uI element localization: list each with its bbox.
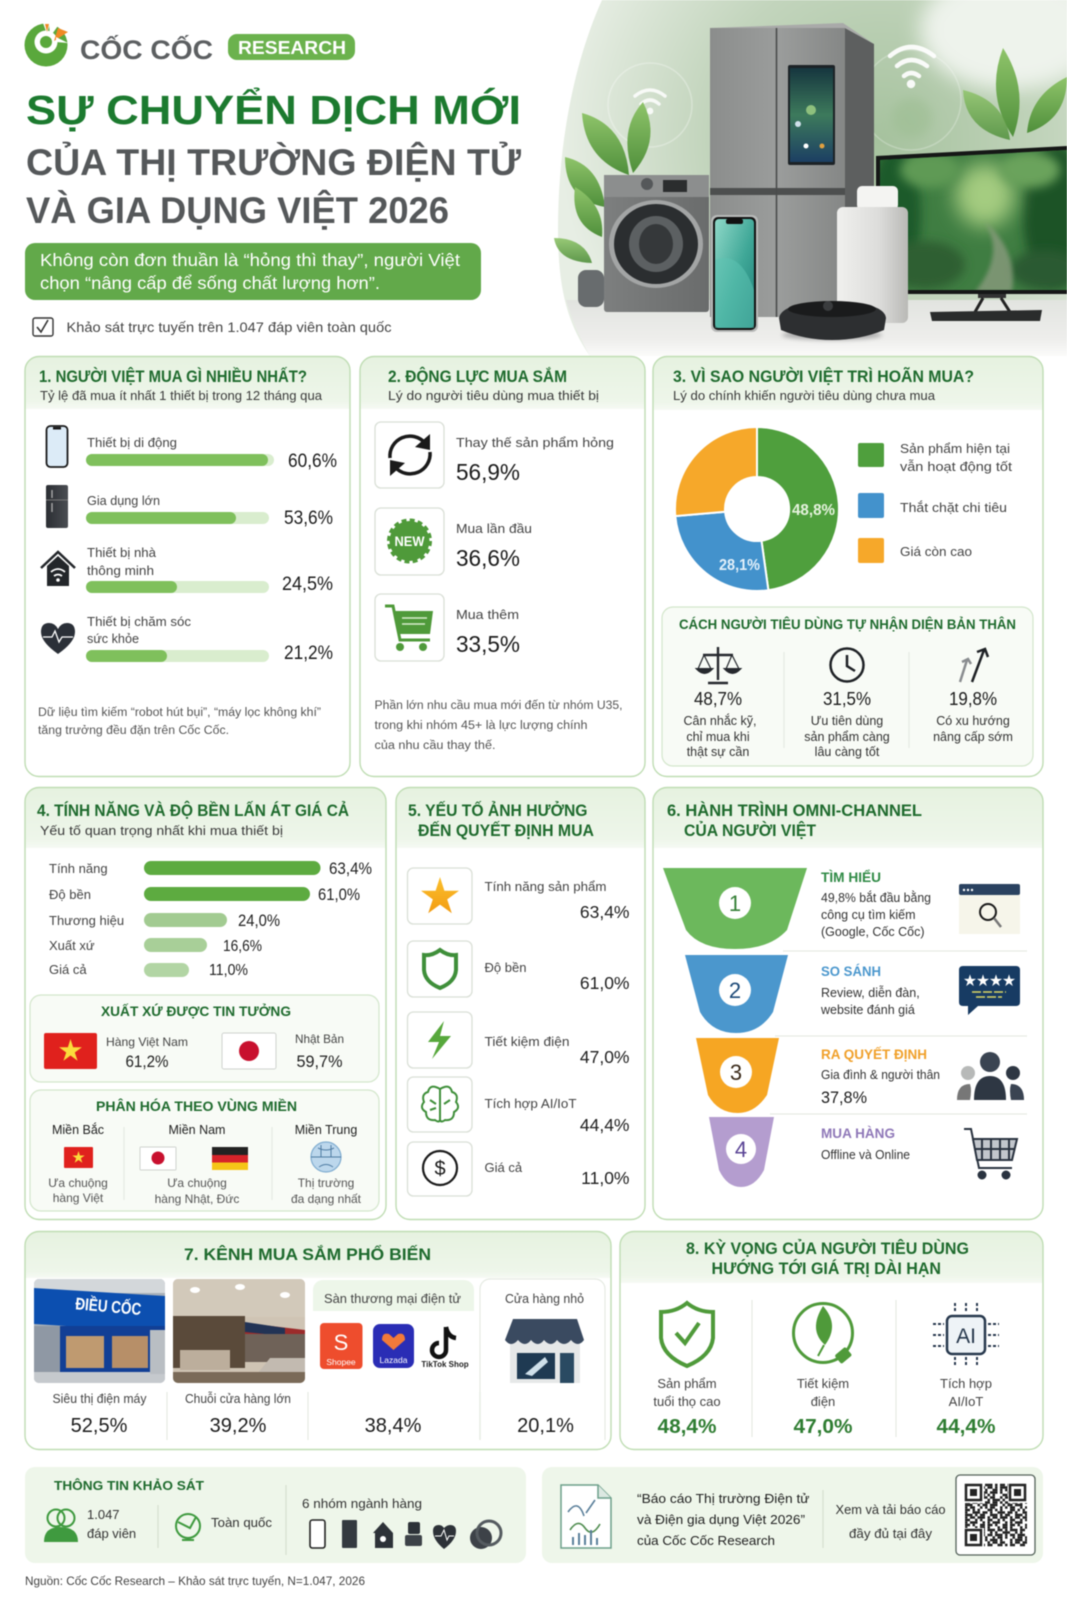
subtitle banner: chọn “nâng cấp để sống chất lượng hơn”.	[40, 273, 380, 293]
icon: Japan flag	[222, 1033, 276, 1069]
icon: shield check	[661, 1303, 713, 1366]
hero illustration: smart appliances	[554, 0, 1067, 356]
factor: price	[484, 1160, 630, 1188]
stat: respondents: 1.047	[87, 1507, 120, 1522]
icon: fridge	[710, 23, 874, 317]
step text: research: 49,8% bắt đầu bằng	[821, 890, 931, 905]
note: của nhu cầu thay thế.	[374, 740, 496, 752]
region: south: hàng Nhật, Đức	[155, 1192, 239, 1206]
bar chart: factors: Xuất xứ	[49, 938, 95, 953]
label: store chain	[185, 1391, 291, 1437]
bar chart: factors: 63,4%	[329, 860, 372, 878]
icon: people	[957, 1052, 1024, 1100]
panel 3: why delay buying	[653, 356, 1043, 776]
icon: review bubble	[959, 966, 1020, 1015]
factor: durability	[484, 960, 630, 993]
note	[38, 707, 321, 737]
icon: wifi left	[635, 90, 665, 113]
label: electronics supermarket: Siêu thị điện máy	[52, 1391, 147, 1406]
note: trong khi nhóm 45+ là lực lượng chính	[374, 720, 588, 732]
stat: nationwide: Toàn quốc	[211, 1515, 272, 1530]
stat: replace broken: 56,9%	[456, 459, 520, 485]
note: Dữ liệu tìm kiếm “robot hút bụi”, “máy lọc không khí”	[38, 707, 321, 719]
stat: considered: chỉ mua khi	[686, 730, 750, 744]
icon: fridge small	[46, 485, 68, 528]
title: VÀ GIA DỤNG VIỆT 2026	[26, 189, 449, 231]
icon: tv	[869, 145, 1067, 321]
stat: considered	[684, 689, 756, 759]
row: smart home: Thiết bị nhà	[87, 545, 157, 560]
bar chart: factors: Thương hiệu	[49, 913, 124, 928]
panel 8: consumer expectations: 8. KỲ VỌNG CỦA NGƯỜI TIÊU DÙNG	[686, 1239, 969, 1258]
stat: first purchase: 36,6%	[456, 545, 520, 571]
bar chart: factors: 16,6%	[223, 938, 262, 955]
icon: smart home	[41, 552, 75, 586]
stat: AI/IoT: AI/IoT	[949, 1394, 983, 1409]
row: mobile devices: 60,6%	[288, 451, 337, 472]
icon: AI chip: AI	[956, 1325, 976, 1348]
stat: upgrade early	[933, 689, 1013, 744]
panel 5: purchase decision factors: ĐẾN QUYẾT ĐỊNH MUA	[418, 821, 594, 840]
icon: Lazada	[373, 1324, 414, 1368]
row: smart home: 24,5%	[282, 574, 333, 595]
sub-panel: trusted origins	[30, 995, 379, 1082]
factor: AI/IoT: 44,4%	[580, 1115, 630, 1135]
stat: first purchase: Mua lần đầu	[456, 521, 532, 536]
panel 4: features and durability over price: Yếu tố quan trọng nhất khi mua thiết bị	[40, 823, 283, 838]
photo: electronics supermarket: ĐIỀU CỐC	[75, 1293, 142, 1319]
legend: Thắt chặt chi tiêu	[900, 500, 1007, 515]
row: smart home	[86, 545, 333, 595]
funnel step 3: 3	[730, 1060, 742, 1085]
icon: heart	[41, 623, 75, 654]
icon: new badge	[375, 508, 444, 575]
funnel step 1: 1	[729, 891, 741, 916]
funnel step 2: 2	[729, 978, 741, 1003]
subtitle banner: Không còn đơn thuần là “hỏng thì thay”, người Việt	[40, 250, 460, 270]
report title: và Điện gia dụng Việt 2026”	[637, 1512, 805, 1527]
title	[26, 86, 521, 231]
panel 1: what Vietnamese buy most	[25, 356, 350, 776]
sub-panel: trusted origins: 61,2%	[126, 1053, 169, 1071]
step text: research: (Google, Cốc Cốc)	[821, 925, 925, 939]
row: health devices	[86, 614, 333, 664]
factor: features: 63,4%	[580, 902, 630, 922]
factor: features	[484, 879, 630, 922]
donut chart	[675, 427, 839, 591]
source note: Nguồn: Cốc Cốc Research – Khảo sát trực tuyến, N=1.047, 2026	[25, 1574, 365, 1588]
stat: additional purchase: 33,5%	[456, 631, 520, 657]
icon: report document	[561, 1485, 611, 1548]
factor: price: Giá cả	[484, 1160, 523, 1175]
sub-panel: trusted origins: Nhật Bản	[295, 1032, 344, 1046]
stat: replace broken	[456, 435, 614, 485]
download call to action	[836, 1502, 946, 1541]
panel 6: omni-channel journey: CỦA NGƯỜI VIỆT	[684, 821, 816, 840]
photo: electronics supermarket	[34, 1279, 165, 1383]
download call to action: đầy đủ tại đây	[849, 1526, 933, 1541]
step text: compare: Review, diễn đàn,	[821, 985, 920, 1000]
factor: durability: 61,0%	[580, 973, 630, 993]
title: SỰ CHUYỂN DỊCH MỚI	[26, 86, 521, 133]
QR code	[956, 1475, 1035, 1555]
icon: new badge: NEW	[394, 533, 425, 549]
factor: durability: Độ bền	[484, 960, 526, 975]
stat: additional purchase	[456, 607, 520, 657]
icon: star	[408, 868, 472, 924]
factor: energy saving	[484, 1034, 630, 1067]
icon: bolt	[408, 1012, 472, 1068]
bar chart: factors: 61,0%	[318, 886, 360, 904]
stat: additional purchase: Mua thêm	[456, 607, 519, 622]
step text: compare	[820, 963, 920, 1017]
panel 4: features and durability over price: 4. TÍNH NĂNG VÀ ĐỘ BỀN LẤN ÁT GIÁ CẢ	[37, 801, 349, 820]
factor: energy saving: Tiết kiệm điện	[484, 1034, 570, 1049]
sub-panel: regional differences	[30, 1090, 379, 1211]
legend	[858, 441, 1012, 563]
stat: use long: 31,5%	[823, 689, 871, 709]
stat: respondents: đáp viên	[87, 1526, 136, 1541]
panel 3: why delay buying: Lý do chính khiến người tiêu dùng chưa mua	[673, 388, 936, 403]
icon: up arrows	[960, 649, 988, 682]
step text: research: TÌM HIỂU	[821, 868, 881, 885]
icon: right plant	[892, 48, 1067, 140]
footer: report callout	[542, 1467, 1043, 1563]
report title	[637, 1491, 810, 1548]
stat: long lifespan	[653, 1376, 721, 1438]
icon: smartphone	[711, 215, 758, 332]
stat: energy saving: Tiết kiệm	[797, 1376, 849, 1391]
row: mobile devices	[86, 435, 337, 472]
stat: upgrade early: Có xu hướng	[936, 714, 1010, 728]
step text: buy: MUA HÀNG	[821, 1125, 895, 1141]
step text: decide	[821, 1046, 940, 1107]
bar chart: factors: 11,0%	[209, 962, 248, 979]
stat: replace broken: Thay thế sản phẩm hỏng	[456, 435, 614, 450]
card: e-commerce: Sàn thương mại điện tử	[324, 1291, 461, 1306]
factor: features: Tính năng sản phẩm	[484, 879, 606, 894]
row: large appliances	[86, 493, 333, 529]
stat: energy saving: 47,0%	[794, 1416, 853, 1438]
bar chart: factors	[49, 860, 372, 979]
icon: TikTok Shop	[421, 1327, 469, 1369]
stat: long lifespan: tuổi thọ cao	[653, 1394, 721, 1409]
row: health devices: sức khỏe	[87, 631, 139, 646]
sub-panel: trusted origins: 59,7%	[296, 1053, 343, 1071]
factor: AI/IoT: Tích hợp AI/IoT	[484, 1096, 577, 1111]
report title: “Báo cáo Thị trường Điện tử	[637, 1491, 810, 1506]
icon: shield	[408, 941, 472, 997]
stat: use long: Ưu tiên dùng	[811, 714, 883, 728]
stat: upgrade early: 19,8%	[949, 689, 997, 709]
icon: washing machine	[604, 175, 709, 312]
stat: considered: Cân nhắc kỹ,	[684, 713, 756, 728]
legend: vẫn hoạt động tốt	[900, 459, 1012, 474]
text: six categories: 6 nhóm ngành hàng	[302, 1496, 422, 1511]
row: large appliances: Gia dụng lớn	[87, 493, 160, 508]
sub-panel: trusted origins: XUẤT XỨ ĐƯỢC TIN TƯỞNG	[101, 1002, 291, 1019]
step text: decide: 37,8%	[821, 1088, 867, 1107]
panel 3: why delay buying: 3. VÌ SAO NGƯỜI VIỆT TRÌ HOÃN MUA?	[673, 366, 974, 386]
donut chart: 48,8%	[792, 502, 835, 519]
step text: compare: website đánh giá	[820, 1003, 915, 1017]
stat: considered: thật sự cần	[687, 745, 749, 759]
icon: eco plug	[794, 1304, 852, 1364]
stat: energy saving	[794, 1376, 853, 1438]
icon: browser search	[959, 884, 1020, 934]
funnel step 1	[663, 868, 807, 949]
sub-panel: self-identification: CÁCH NGƯỜI TIÊU DÙNG TỰ NHẬN DIỆN BẢN THÂN	[679, 615, 1016, 632]
panel 5: purchase decision factors: 5. YẾU TỐ ẢNH HƯỞNG	[408, 800, 588, 820]
note: Phần lớn nhu cầu mua mới đến từ nhóm U35,	[374, 700, 622, 712]
stat: use long: sản phẩm càng	[804, 730, 890, 744]
label: store chain: 39,2%	[210, 1415, 267, 1437]
icon: Lazada: Lazada	[380, 1355, 408, 1365]
icon: respondents	[44, 1510, 78, 1542]
panel 7: popular shopping channels	[25, 1231, 611, 1450]
icon: phone	[46, 426, 68, 467]
row: smart home: thông minh	[87, 563, 154, 578]
row: large appliances: 53,6%	[284, 508, 333, 529]
card: e-commerce	[313, 1280, 474, 1437]
region: central: đa dạng nhất	[291, 1192, 362, 1206]
step text: compare: SO SÁNH	[821, 963, 881, 979]
label: electronics supermarket	[52, 1391, 147, 1437]
funnel step 2	[685, 955, 788, 1033]
icon: dollar	[408, 1142, 472, 1196]
row: mobile devices: Thiết bị di động	[87, 435, 177, 450]
step text: decide: Gia đình & người thân	[821, 1068, 940, 1082]
region: central: Miền Trung	[295, 1123, 357, 1137]
icon: AI chip	[933, 1303, 999, 1366]
panel 8: consumer expectations: HƯỚNG TỚI GIÁ TRỊ DÀI HẠN	[712, 1259, 941, 1278]
stat: long lifespan: Sản phẩm	[657, 1376, 717, 1391]
icon: left plant	[554, 102, 651, 307]
footer: survey info: THÔNG TIN KHẢO SÁT	[54, 1478, 204, 1493]
panel 1: what Vietnamese buy most: Tỷ lệ đã mua ít nhất 1 thiết bị trong 12 tháng qua	[40, 388, 323, 403]
funnel step 3	[696, 1038, 779, 1113]
icon: Shopee	[320, 1323, 362, 1369]
research pill: RESEARCH	[238, 37, 346, 58]
icon: shopping cart	[964, 1129, 1017, 1178]
region: central	[291, 1123, 362, 1206]
photo: large store chain	[173, 1279, 305, 1383]
icon: robot vacuum	[779, 301, 886, 340]
row: health devices: Thiết bị chăm sóc	[87, 614, 192, 629]
factor: AI/IoT	[484, 1096, 630, 1135]
stat: AI/IoT: 44,4%	[936, 1416, 996, 1438]
icon: replace arrows	[375, 422, 444, 488]
region: central: Thị trường	[298, 1176, 354, 1190]
icon: brain	[408, 1077, 472, 1132]
step text: decide: RA QUYẾT ĐỊNH	[821, 1046, 927, 1062]
panel 7: popular shopping channels: 7. KÊNH MUA SẮM PHỔ BIẾN	[184, 1245, 431, 1264]
icon: Shopee: Shopee	[326, 1357, 356, 1367]
panel 6: omni-channel journey: 6. HÀNH TRÌNH OMNI-CHANNEL	[667, 801, 922, 820]
stat: AI/IoT	[936, 1376, 996, 1438]
donut chart: 28,1%	[719, 557, 760, 574]
bar chart: factors: Giá cả	[49, 962, 87, 977]
bar chart: factors: Tính năng	[49, 861, 108, 876]
icon: dollar: $	[434, 1158, 446, 1180]
report title: của Cốc Cốc Research	[637, 1533, 775, 1548]
sub-panel: self-identification	[662, 607, 1033, 766]
icon: scale	[697, 647, 740, 683]
stat: respondents	[87, 1507, 136, 1541]
download call to action: Xem và tải báo cáo	[836, 1502, 946, 1517]
panel 4: features and durability over price	[25, 787, 386, 1220]
logo wordmark: CỐC CỐC	[80, 33, 213, 65]
factor: price: 11,0%	[581, 1168, 630, 1188]
region: north: Miền Bắc	[52, 1122, 104, 1137]
logo: Cốc Cốc Research	[24, 23, 355, 66]
sub-panel: regional differences: PHÂN HÓA THEO VÙNG MIỀN	[96, 1097, 297, 1114]
icon: TikTok Shop: TikTok Shop	[421, 1360, 469, 1369]
card: small stores	[480, 1279, 605, 1440]
region: south	[140, 1123, 248, 1206]
sub-panel: trusted origins: Hàng Việt Nam	[106, 1035, 188, 1049]
stat: first purchase	[456, 521, 532, 571]
step text: research	[821, 868, 931, 939]
region: south: Miền Nam	[169, 1123, 225, 1137]
factor: energy saving: 47,0%	[580, 1047, 630, 1067]
region: south: Ưa chuộng	[167, 1176, 227, 1190]
footer: survey info	[25, 1467, 526, 1563]
note: tăng trưởng đều đặn trên Cốc Cốc.	[38, 725, 229, 737]
region: north	[48, 1122, 108, 1205]
panel 1: what Vietnamese buy most: 1. NGƯỜI VIỆT MUA GÌ NHIỀU NHẤT?	[39, 367, 307, 386]
panel 2: purchase motivation	[360, 356, 645, 776]
icon: Vietnam flag	[44, 1033, 97, 1069]
step text: research: công cụ tìm kiếm	[821, 908, 915, 922]
funnel step 4: 4	[735, 1137, 747, 1162]
icon: nationwide	[176, 1514, 200, 1540]
legend: Sản phẩm hiện tại	[900, 441, 1010, 456]
label: electronics supermarket: 52,5%	[71, 1415, 128, 1437]
icon: purifier	[837, 186, 908, 323]
step text: buy: Offline và Online	[821, 1148, 910, 1162]
card: small stores: 20,1%	[517, 1415, 574, 1437]
panel 6: omni-channel journey	[653, 787, 1043, 1220]
panel 8: consumer expectations	[620, 1231, 1043, 1450]
step text: buy	[821, 1125, 910, 1162]
icon: clock	[830, 648, 864, 682]
region: north: hàng Việt	[53, 1191, 104, 1205]
icon: store	[505, 1319, 584, 1383]
legend: Giá còn cao	[900, 544, 972, 559]
stat: use long: lâu càng tốt	[815, 745, 880, 759]
stat: considered: 48,7%	[694, 689, 742, 709]
icon: cart green	[375, 594, 444, 661]
card: small stores: Cửa hàng nhỏ	[505, 1291, 584, 1306]
research pill	[228, 34, 355, 60]
icon: Shopee: S	[334, 1330, 348, 1355]
subtitle banner	[25, 243, 481, 300]
card: e-commerce: 38,4%	[365, 1415, 422, 1437]
panel 2: purchase motivation: Lý do người tiêu dùng mua thiết bị	[388, 388, 599, 403]
panel 5: purchase decision factors	[396, 787, 645, 1220]
icon: review bubble: ★★★★	[963, 973, 1016, 988]
stat: energy saving: điện	[811, 1394, 835, 1409]
region: north: Ưa chuộng	[48, 1176, 108, 1190]
title: CỦA THỊ TRƯỜNG ĐIỆN TỬ	[26, 141, 521, 183]
funnel step 4	[709, 1117, 774, 1187]
bar chart: factors: 24,0%	[238, 912, 280, 930]
icon: logo mark	[24, 23, 68, 66]
panel 2: purchase motivation: 2. ĐỘNG LỰC MUA SẮM	[388, 367, 567, 386]
bar chart: factors: Độ bền	[49, 887, 91, 902]
stat: AI/IoT: Tích hợp	[940, 1376, 992, 1391]
label: store chain: Chuỗi cửa hàng lớn	[185, 1391, 291, 1406]
note	[374, 700, 622, 752]
stat: upgrade early: nâng cấp sớm	[933, 730, 1013, 744]
icons: six categories	[310, 1520, 501, 1549]
icon: wifi right	[890, 47, 934, 86]
row: health devices: 21,2%	[284, 643, 333, 664]
stat: use long	[804, 689, 890, 759]
survey note: Khảo sát trực tuyến trên 1.047 đáp viên toàn quốc	[66, 319, 392, 335]
stat: long lifespan: 48,4%	[658, 1416, 717, 1438]
